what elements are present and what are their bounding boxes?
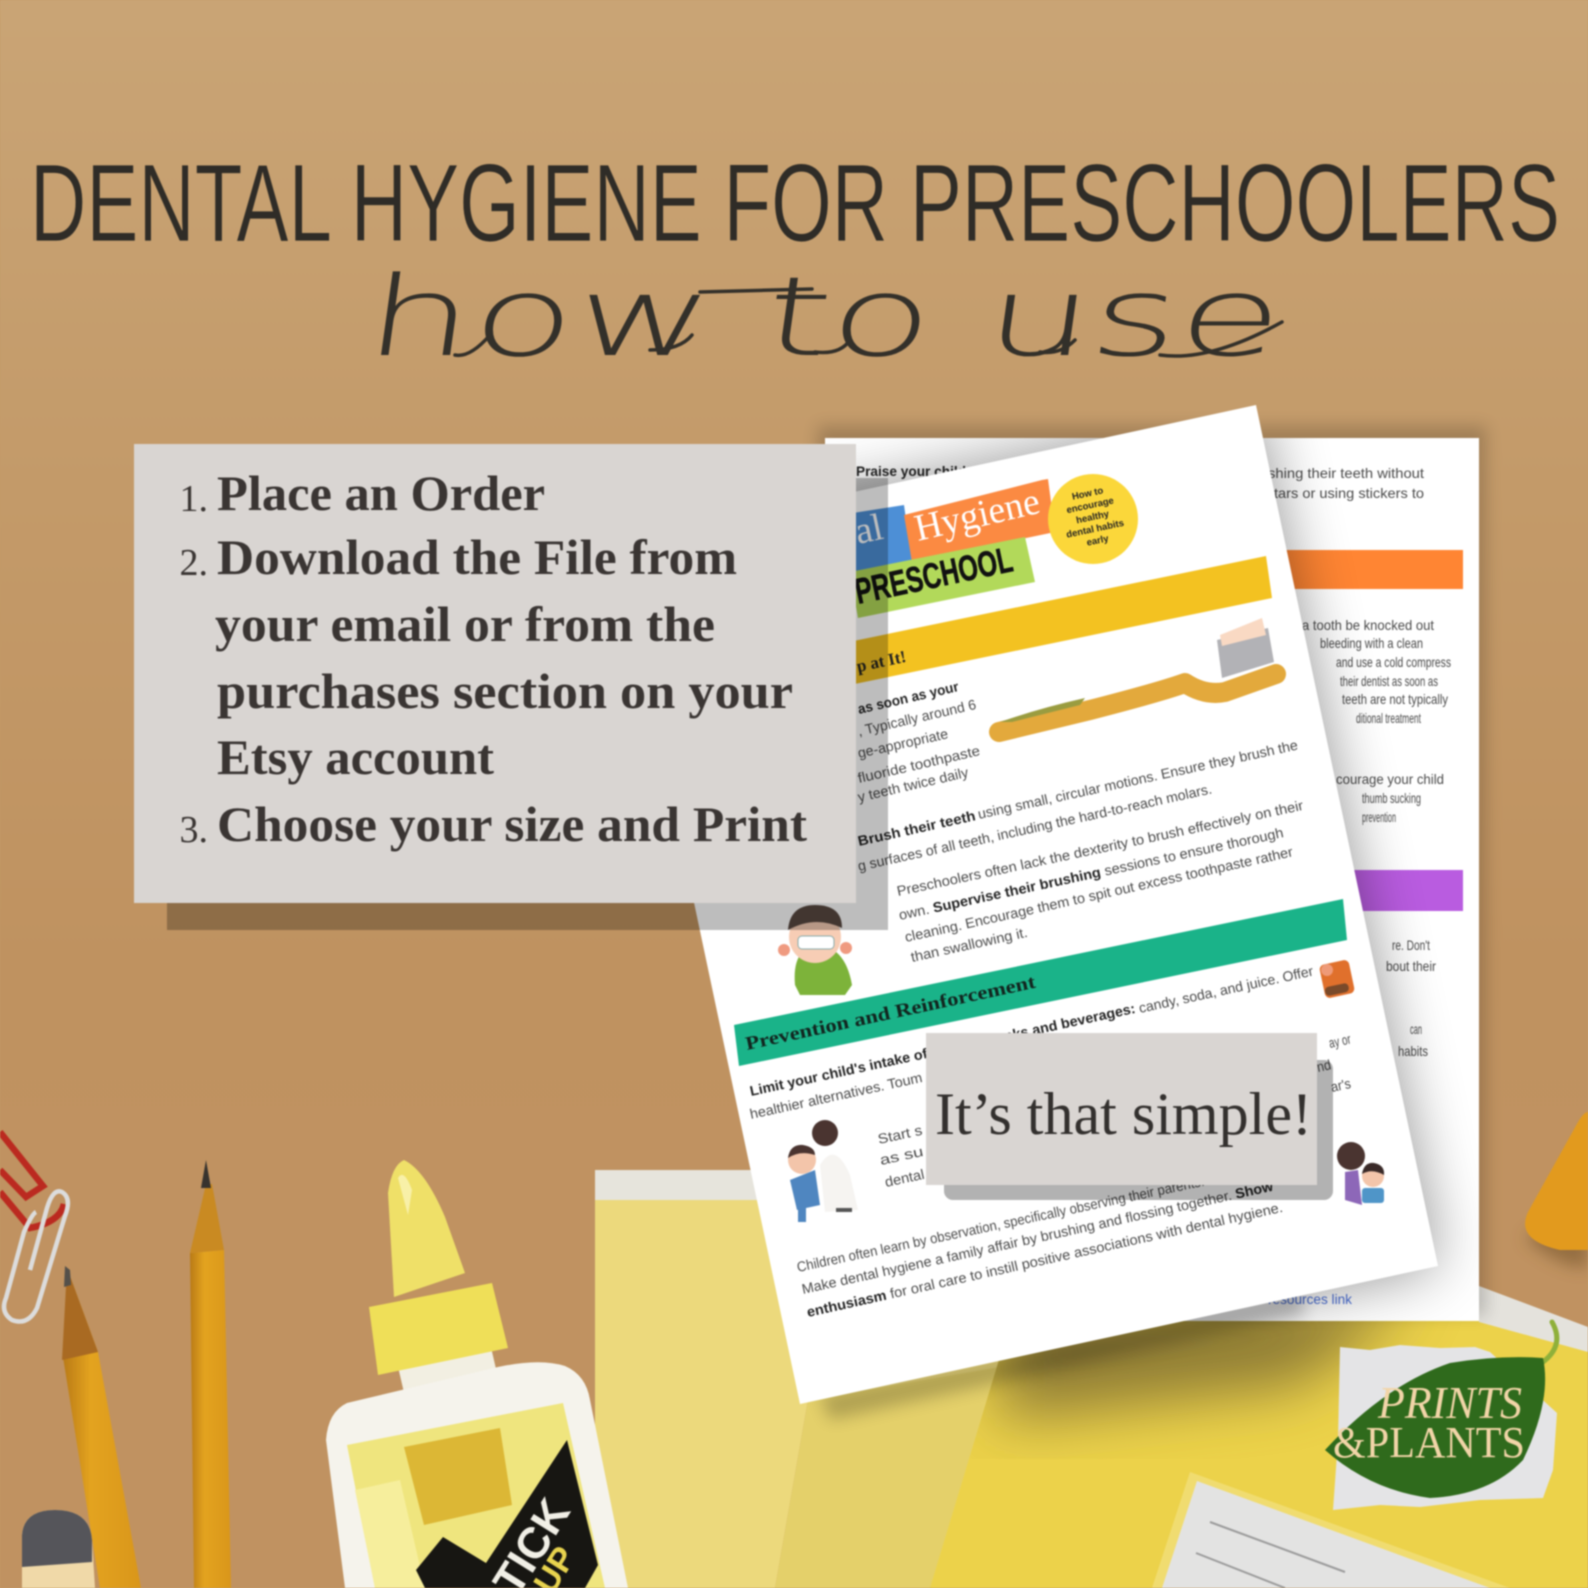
header: blue box text: al (851, 506, 887, 553)
header: yellow circle: encourage (1066, 495, 1115, 516)
section heading yellow: p at It! (855, 647, 908, 676)
step 2: 2. (180, 542, 208, 584)
page text: prevention: candy, soda, and juice. Offer (1137, 963, 1315, 1016)
page text: brushing instructions: Brush their teeth (856, 807, 977, 849)
subtitle: how to use: how to use (358, 253, 1291, 382)
subtitle: how to use (358, 253, 1291, 382)
section bar purple (1300, 870, 1463, 911)
page text: prevention: as su (878, 1143, 925, 1168)
page text: prevention: ar's (1329, 1075, 1352, 1095)
page text: brushing instructions: Preschoolers often lack the dexterity to brush effectively on their (895, 797, 1305, 899)
back page text: bout their (1386, 958, 1436, 974)
back page text: teeth are not typically (1342, 691, 1448, 707)
yellow folder (595, 1170, 1588, 1588)
logo text 2: &PLANTS (1333, 1418, 1525, 1467)
front page shadow on folder (820, 1292, 1305, 1420)
step 3: Choose your size and Print (217, 796, 807, 852)
page text: prevention: nd (1315, 1056, 1332, 1075)
page text: brushing instructions: using small, circular motions. Ensure they brush the (976, 737, 1299, 822)
back page text: a tooth be knocked out (1302, 617, 1434, 633)
page text: prevention: Limit your child's intake of sugary snacks and beverages: (748, 1000, 1137, 1099)
orange eraser (1525, 1112, 1588, 1268)
back page text (856, 463, 1451, 1307)
page text: brushing instructions: cleaning. Encourage them to spit out excess toothpaste rather (903, 843, 1295, 945)
section bar yellow (834, 556, 1272, 687)
page text: lead by example: Make dental hygiene a family affair by brushing and flossing together. Show (800, 1178, 1274, 1297)
back page text: resources link (1268, 1291, 1353, 1307)
step 2: your email or from the (215, 596, 715, 652)
steps panel (134, 444, 856, 903)
back page text: their dentist as soon as (1340, 673, 1438, 689)
front page (618, 405, 1438, 1404)
header: yellow circle: dental habits (1065, 518, 1125, 541)
header: yellow circle (1048, 474, 1138, 564)
steps panel shadow (167, 478, 888, 930)
page text: brushing instructions: , Typically around 6 (856, 696, 978, 739)
illustration: child and parent (788, 1120, 858, 1222)
back page (824, 437, 1480, 1322)
header: green box (850, 537, 1035, 618)
header: Hygiene text: Hygiene (911, 480, 1044, 550)
header: PRESCHOOL text: PRESCHOOL (851, 538, 1016, 612)
page text: brushing instructions: than swallowing it. (909, 924, 1029, 965)
section bar green (734, 899, 1347, 1066)
simple callout shadow (944, 1060, 1333, 1200)
back page text: courage your child (1336, 771, 1444, 787)
illustration: snacks (1319, 959, 1355, 999)
back page text: and use a cold compress (1336, 654, 1451, 670)
page text: brushing instructions: as soon as your (856, 678, 961, 717)
leaf stem (1543, 1322, 1557, 1362)
page text: prevention: healthier alternatives. Toum (748, 1069, 924, 1122)
step 2 (180, 529, 793, 785)
glue bottle (326, 1160, 628, 1588)
page text: prevention: ay or (1327, 1031, 1352, 1051)
header: blue box (840, 505, 912, 578)
back page text: tars or using stickers to (1274, 485, 1424, 501)
page text: lead by example: Children often learn by observation, specifically observing their parents. (795, 1173, 1206, 1275)
header: orange box (904, 479, 1055, 562)
back page text: shing their teeth without (1268, 465, 1424, 481)
back page text: ditional treatment (1356, 710, 1421, 726)
red paperclip (0, 1132, 64, 1228)
header: yellow circle: healthy (1075, 509, 1111, 526)
pencil right (190, 1160, 231, 1588)
back page text: can (1410, 1021, 1422, 1037)
page text: prevention: dental (883, 1166, 926, 1190)
pencil left (62, 1266, 141, 1588)
index card (1152, 1472, 1510, 1588)
torn paper (1333, 1345, 1557, 1510)
section bar orange (1230, 550, 1463, 589)
back page text: thumb sucking (1362, 790, 1421, 806)
step 3: 3. (180, 809, 208, 851)
silver paperclip (4, 1191, 68, 1322)
step 1: Place an Order (217, 465, 545, 521)
page text: prevention (748, 963, 1352, 1190)
header: yellow circle: How to (1071, 485, 1105, 503)
page text: prevention: Start s (876, 1122, 924, 1147)
soft shadow from front page (856, 438, 1468, 1322)
pencil eraser end (22, 1510, 95, 1588)
logo: prints and plants (1325, 1322, 1557, 1510)
back paper shadow (818, 426, 1486, 1316)
illustration: mother and son (1337, 1142, 1384, 1205)
section heading green: Prevention and Reinforcement (744, 972, 1038, 1055)
logo text: PRINTS (1377, 1377, 1522, 1428)
icon: toothbrush (999, 618, 1276, 732)
page text: lead by example: enthusiasm for oral care to instill positive associations with dental hygiene. (805, 1199, 1284, 1320)
step 2: purchases section on your (217, 663, 793, 719)
page text: brushing instructions: y teeth twice daily (856, 764, 970, 805)
page text: brushing instructions: ge-appropriate (856, 725, 950, 761)
page text: brushing instructions: fluoride toothpaste (856, 742, 982, 786)
callout: it's that simple: It’s that simple! (935, 1081, 1312, 1147)
back page text: prevention (1362, 809, 1396, 825)
back page text: habits (1398, 1043, 1428, 1059)
step 2: Etsy account (217, 729, 494, 785)
page text: brushing instructions: own. Supervise their brushing sessions to ensure thorough (897, 824, 1285, 923)
back page text: bleeding with a clean (1320, 635, 1423, 651)
leaf (1325, 1357, 1545, 1498)
header: yellow circle: early (1086, 533, 1110, 549)
callout: it's that simple (926, 1033, 1317, 1185)
page text: brushing instructions: g surfaces of all teeth, including the hard-to-reach molars. (856, 781, 1213, 874)
back page text: Praise your child (856, 463, 966, 479)
back page text: re. Don't (1392, 937, 1430, 953)
step 1: 1. (180, 478, 208, 520)
page text: brushing instructions (856, 678, 1305, 965)
step 2: Download the File from (217, 529, 737, 585)
illustration: boy brushing teeth (778, 905, 852, 995)
